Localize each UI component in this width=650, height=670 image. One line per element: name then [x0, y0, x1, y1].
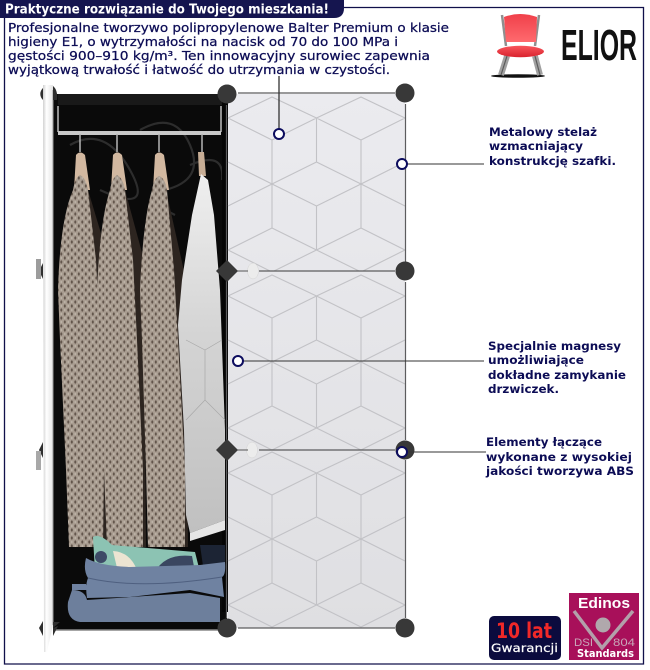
label: connectors: jakości tworzywa ABS	[485, 464, 634, 478]
certification badge: DSI	[574, 637, 593, 649]
label: connectors: wykonane z wysokiej	[486, 450, 632, 464]
intro text block	[8, 21, 449, 77]
label: magnets: dokładne zamykanie	[488, 368, 626, 382]
certification badge	[569, 593, 639, 660]
intro text block: wyjątkową trwałość i łatwość do utrzymania w czystości.	[8, 63, 390, 77]
callout: material pointer	[274, 76, 284, 139]
back garment shadows	[70, 190, 188, 547]
left door	[43, 85, 53, 652]
label: metal frame: konstrukcję szafki.	[489, 154, 616, 168]
logo: chair icon	[491, 14, 545, 78]
label: metal frame	[489, 125, 616, 168]
header banner: Praktyczne rozwiązanie do Twojego mieszkania!	[5, 2, 329, 18]
metal frame lines	[226, 93, 406, 628]
warranty badge	[489, 616, 561, 660]
callout: connectors pointer	[397, 447, 486, 457]
intro text block: Profesjonalne tworzywo polipropylenowe Balter Premium o klasie	[8, 21, 449, 35]
door panel: middle module	[228, 271, 405, 450]
certification badge: Edinos	[578, 595, 630, 612]
folded blankets	[68, 536, 225, 622]
label: magnets: umożliwiające	[488, 353, 584, 367]
wardrobe: open compartment	[53, 94, 228, 630]
door connectors and handles	[36, 86, 60, 636]
door panel: top module	[228, 94, 405, 272]
intro text block: higieny E1, o wytrzymałości na nacisk od 70 do 100 MPa i	[8, 35, 398, 49]
warranty badge: Gwarancji	[491, 641, 558, 655]
label: metal frame: Metalowy stelaż	[489, 125, 597, 139]
label: magnets: drzwiczek.	[488, 382, 559, 396]
magnets	[236, 263, 258, 458]
door panel: bottom module	[228, 450, 405, 628]
ABS connectors	[216, 84, 414, 638]
label: magnets: Specjalnie magnesy	[488, 339, 622, 353]
label: connectors	[485, 435, 634, 478]
warranty badge: 10 lat	[496, 619, 552, 643]
intro text block: gęstości 900–910 kg/m³. Ten innowacyjny surowiec zapewnia	[8, 49, 430, 63]
label: metal frame: wzmacniający	[489, 139, 584, 153]
label: magnets	[488, 339, 626, 396]
certification badge: 804	[613, 637, 635, 649]
hanging sweaters	[58, 134, 202, 547]
hanging white shirt	[178, 152, 225, 541]
certification badge: Standards	[577, 648, 634, 660]
clothes rail	[58, 106, 221, 135]
callout: metal frame pointer	[397, 159, 484, 169]
label: connectors: Elementy łączące	[486, 435, 602, 449]
callout: magnets pointer	[233, 356, 484, 366]
